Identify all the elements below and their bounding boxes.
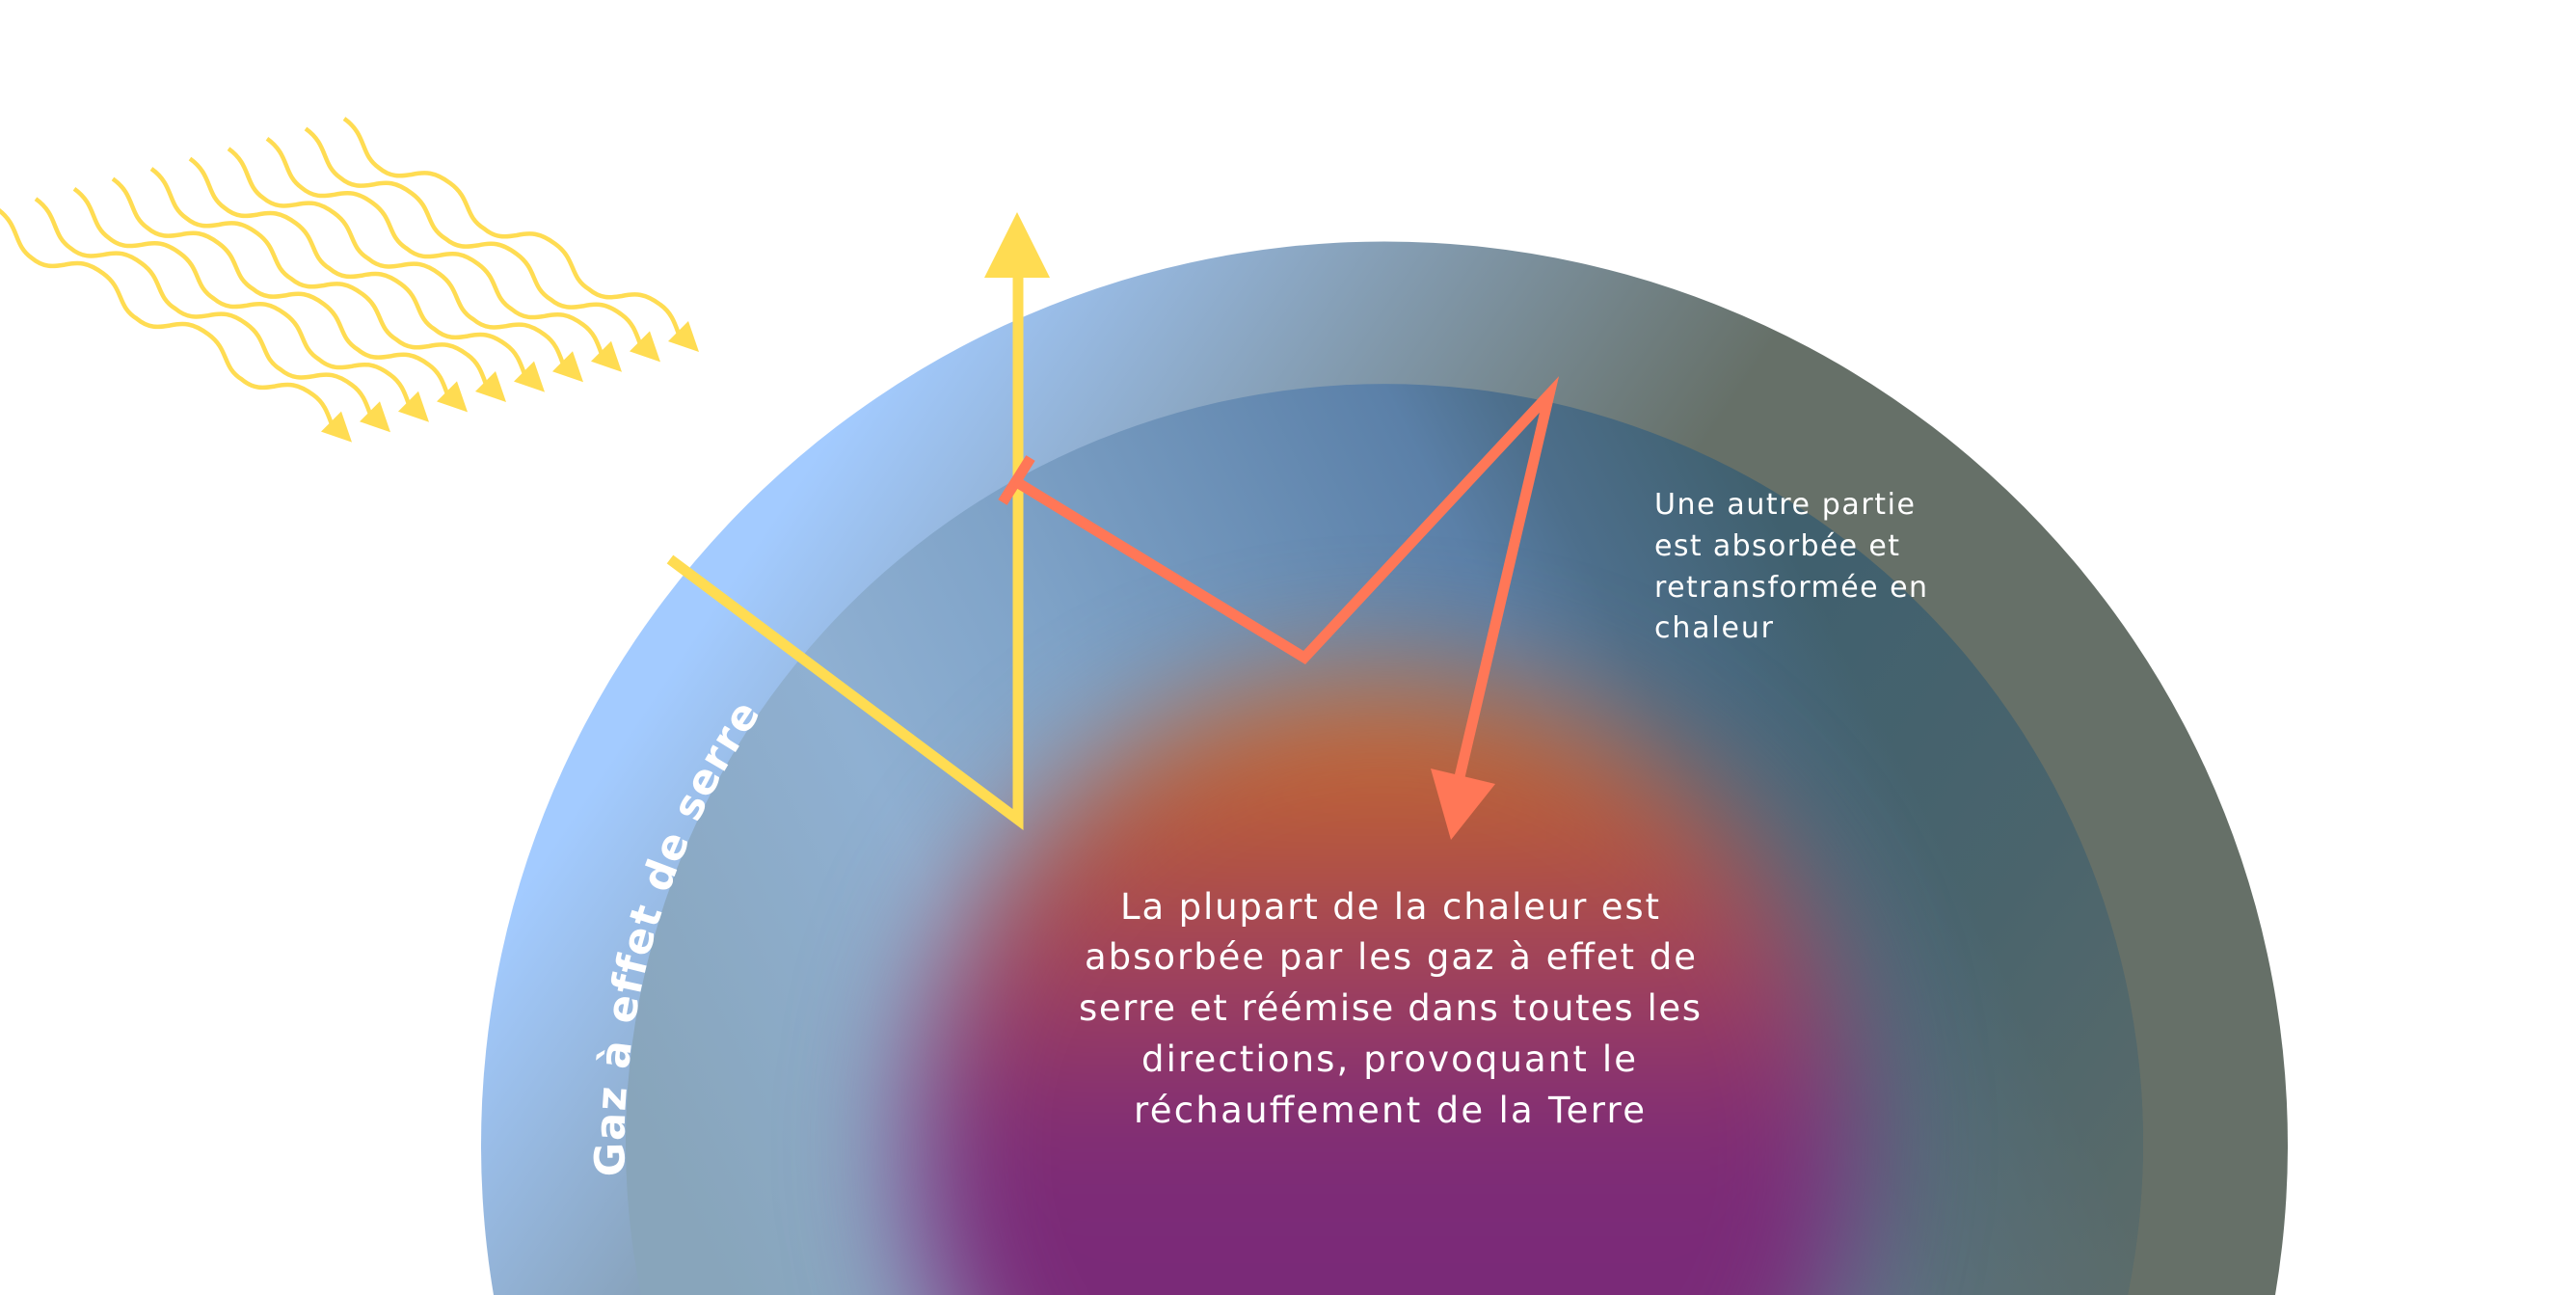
text block: absorbed part: Une autre partie: [1654, 488, 1915, 522]
text block: main explanation: [1079, 886, 1701, 1131]
text block: main explanation: serre et réémise dans toutes les: [1079, 987, 1701, 1029]
inner atmosphere circle: [626, 384, 2143, 1295]
arrow: yellow sunlight reflected out to space: [670, 212, 1050, 820]
text block: main explanation: directions, provoquant le: [1141, 1039, 1636, 1080]
text block: absorbed part: est absorbée et: [1654, 529, 1899, 563]
label: greenhouse gases curved text: Gaz à effet de serre: [594, 706, 758, 1174]
text block: main explanation: La plupart de la chaleur est: [1120, 886, 1659, 928]
text block: main explanation: réchauffement de la Terre: [1134, 1090, 1645, 1131]
outer atmosphere circle: [481, 241, 2288, 1295]
text block: absorbed part: chaleur: [1654, 611, 1774, 645]
text block: absorbed part: [1654, 488, 1927, 645]
arrow: orange heat bouncing in the atmosphere: [1003, 394, 1549, 840]
text block: main explanation: absorbée par les gaz à effet de: [1085, 936, 1696, 978]
earth heat glow: [912, 675, 1857, 1295]
icon: solar radiation wavy arrows: [0, 119, 699, 443]
text block: absorbed part: retransformée en: [1654, 571, 1927, 605]
